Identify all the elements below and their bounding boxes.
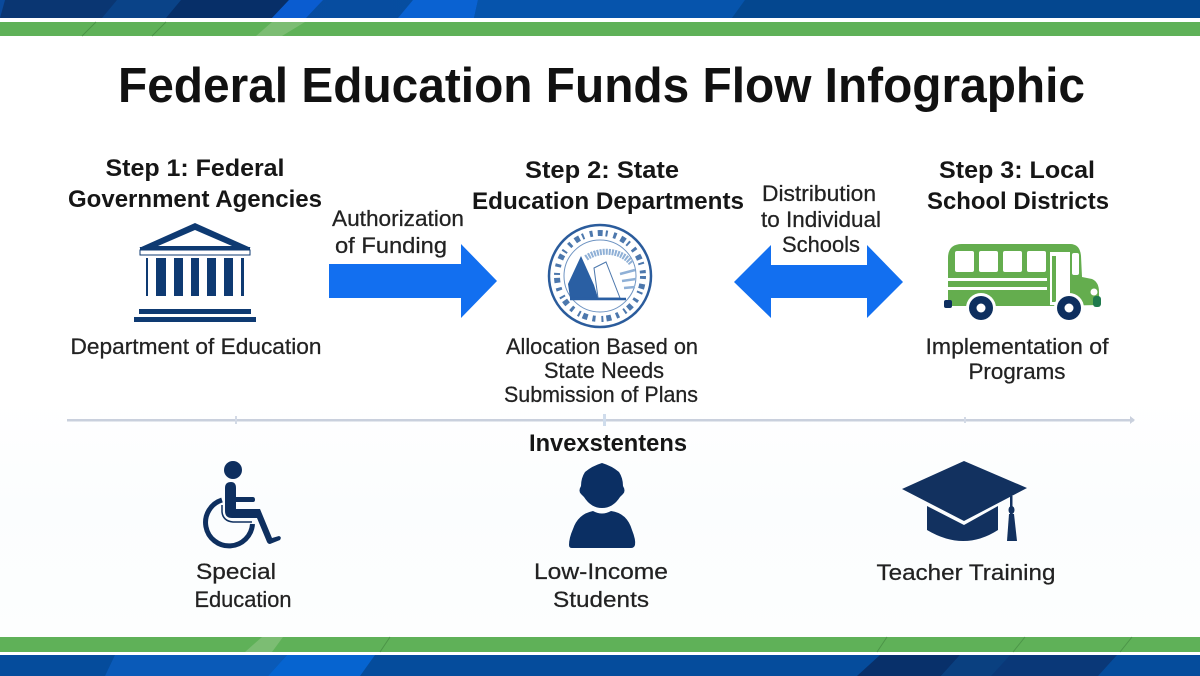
step 2 caption: Submission of Plans [504, 382, 698, 407]
label: teacher training: Teacher Training [876, 560, 1056, 585]
step 3 heading: School Districts [927, 188, 1109, 215]
step 2 caption: State Needs [544, 358, 664, 383]
label: special education [194, 559, 292, 612]
arrow label: distribution: to Individual [761, 207, 881, 232]
label: special education: Education [194, 587, 292, 612]
step 3 caption: Implementation of [926, 334, 1109, 359]
step 1 heading [68, 155, 322, 213]
icon: government building [134, 223, 256, 322]
step 1 caption: Department of Education [70, 334, 322, 359]
icon: school bus [944, 244, 1101, 323]
arrow label: authorization: of Funding [335, 233, 447, 258]
step 2 heading: Step 2: State [525, 157, 679, 184]
divider line [67, 414, 1135, 426]
label: low-income students [534, 559, 668, 612]
step 2 heading [472, 157, 744, 215]
arrow: right [329, 244, 497, 318]
step 3 caption: Programs [968, 359, 1066, 384]
label: low-income students: Students [553, 587, 649, 612]
icon: state seal [549, 225, 651, 327]
arrow label: distribution: Schools [782, 232, 860, 257]
title: Federal Education Funds Flow Infographic [118, 59, 1085, 113]
icon: student [569, 463, 635, 548]
step 3 caption [926, 334, 1109, 384]
label: low-income students: Low-Income [534, 559, 668, 584]
step 3 heading [927, 157, 1109, 215]
step 2 caption [504, 334, 698, 407]
arrow: double-headed [734, 245, 903, 318]
step 2 heading: Education Departments [472, 188, 744, 215]
arrow label: authorization [332, 206, 464, 258]
label: special education: Special [196, 559, 276, 584]
bottom banner [0, 637, 1200, 676]
arrow label: distribution [761, 181, 881, 257]
arrow label: distribution: Distribution [762, 181, 876, 206]
arrow label: authorization: Authorization [332, 206, 464, 231]
step 1 heading: Step 1: Federal [106, 155, 284, 182]
section heading: Invexstentens [529, 430, 687, 457]
step 1 heading: Government Agencies [68, 186, 322, 213]
step 3 heading: Step 3: Local [939, 157, 1095, 184]
icon: wheelchair [206, 461, 281, 546]
top banner [0, 0, 1200, 36]
icon: graduation cap [902, 461, 1027, 541]
step 2 caption: Allocation Based on [506, 334, 698, 359]
